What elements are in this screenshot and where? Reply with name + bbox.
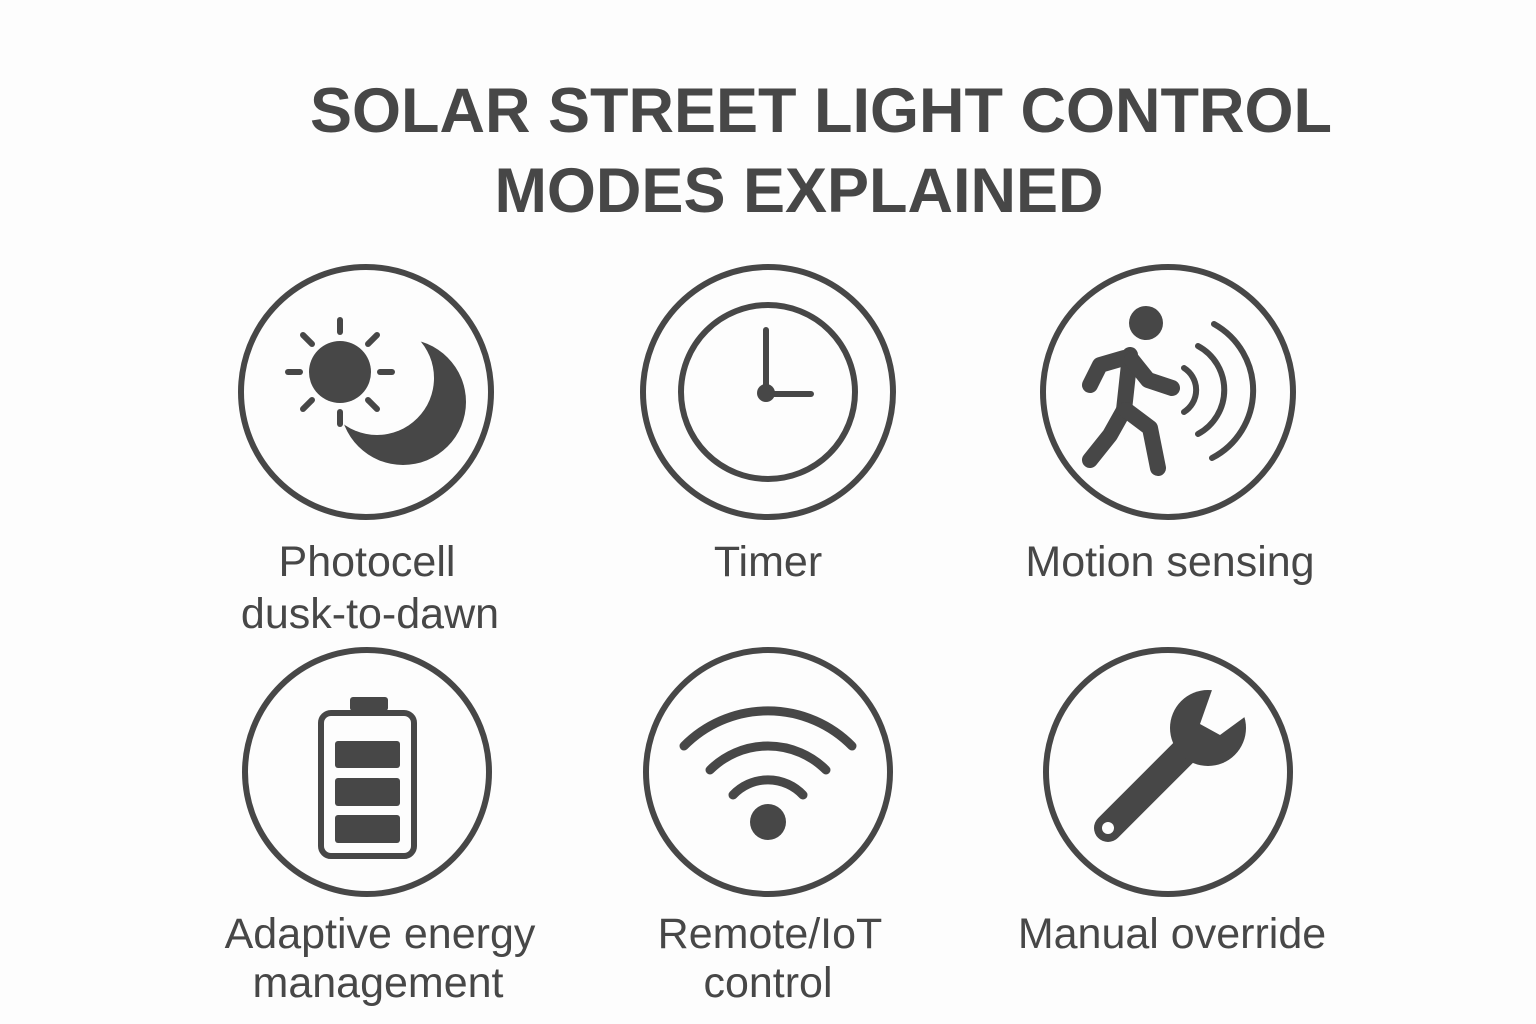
panel: remote iot (646, 650, 890, 1007)
title (310, 76, 1332, 226)
label: photocell: Photocell (279, 538, 455, 586)
icon: wifi (646, 650, 890, 894)
panel: adaptive energy (225, 650, 536, 1007)
label: adaptive energy: management (252, 959, 504, 1007)
label: motion sensing: Motion sensing (1025, 538, 1315, 586)
label: remote iot: control (703, 959, 833, 1007)
icon: battery (245, 650, 489, 894)
label: photocell: dusk-to-dawn (241, 590, 499, 638)
label: photocell (241, 538, 499, 638)
label: timer: Timer (714, 538, 822, 586)
label: remote iot (658, 910, 882, 1007)
panel: timer (643, 267, 893, 586)
title: MODES EXPLAINED (494, 156, 1104, 226)
title: SOLAR STREET LIGHT CONTROL (310, 76, 1332, 146)
icon: sun and moon (241, 267, 491, 517)
label: adaptive energy: Adaptive energy (225, 910, 536, 958)
panel: manual override (1018, 650, 1326, 958)
label: adaptive energy (225, 910, 536, 1007)
icon: wrench (1046, 650, 1290, 894)
panel: motion sensing (1025, 267, 1315, 586)
icon: clock (643, 267, 893, 517)
panel: photocell (241, 267, 499, 638)
label: manual override: Manual override (1018, 910, 1326, 958)
icon: walking person with waves (1043, 267, 1293, 517)
label: remote iot: Remote/IoT (658, 910, 882, 958)
